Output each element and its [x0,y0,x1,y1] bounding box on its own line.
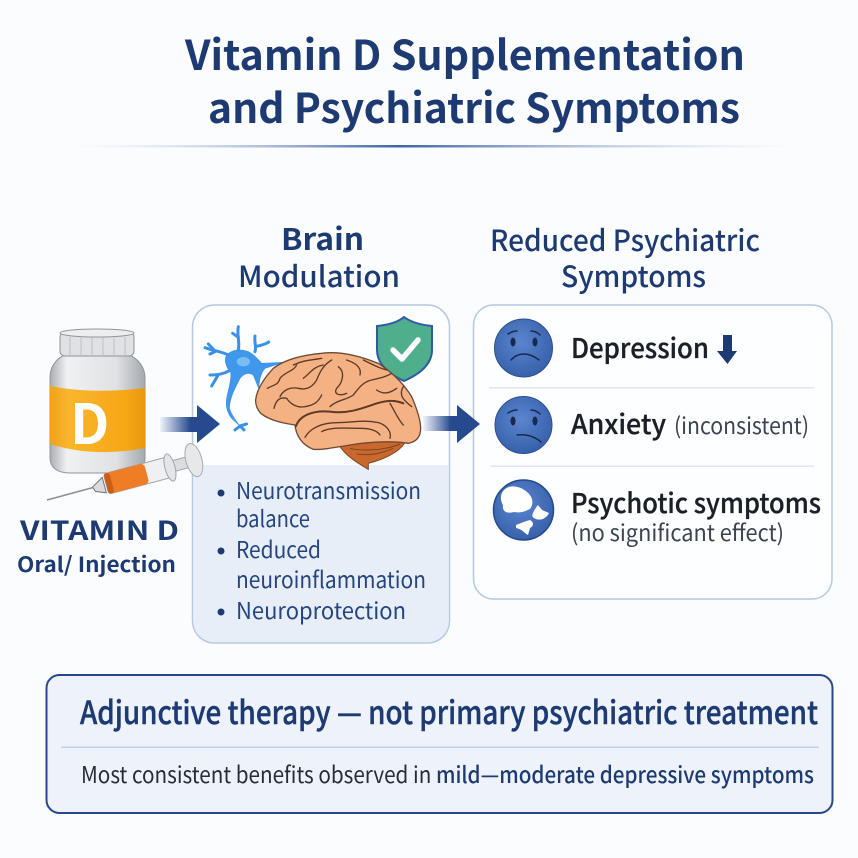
bullet list: Neurotransmission [236,472,421,506]
label: anxiety: (inconsistent) [674,407,809,441]
arrow: brain to symptoms [423,405,480,443]
icon: shield [377,317,432,381]
heading: reduced psychiatric symptoms: Symptoms [561,254,706,296]
icon: vitamin D bottle: D [70,380,109,460]
icon: down arrow [717,335,737,364]
bullet list: balance [236,500,310,534]
icon: neuron [205,327,283,430]
icon: vitamin D bottle [50,329,145,473]
heading: reduced psychiatric symptoms: Reduced Psychiatric [490,218,760,260]
label: psychotic symptoms: Psychotic symptoms [571,482,821,521]
bullet list [218,472,426,626]
heading: reduced psychiatric symptoms [490,218,760,296]
arrow: vitamin to brain [160,405,220,443]
label: psychotic symptoms [571,482,821,548]
bullet list: neuroinflammation [236,561,426,595]
panel: adjunctive therapy callout [46,675,832,813]
title [184,22,745,135]
heading: brain modulation: Modulation [238,254,400,296]
label: vitamin D oral/injection: Oral/ Injection [17,549,176,579]
title: and Psychiatric Symptoms [208,75,740,135]
label: psychotic symptoms: (no significant effect) [571,514,784,548]
label: vitamin D oral/injection: VITAMIN D [19,511,179,548]
title: Vitamin D Supplementation [184,22,745,82]
label: vitamin D oral/injection [17,511,179,579]
panel: brain modulation [192,305,450,643]
bullet list: Neuroprotection [236,592,406,626]
icon: brain [256,353,421,469]
callout detail: Most consistent benefits observed in mild—moderate depressive symptoms [81,756,814,790]
heading: brain modulation [238,215,400,296]
icon: worried face [495,396,552,454]
label: anxiety: Anxiety [571,403,666,442]
heading: brain modulation: Brain [281,215,364,259]
label: depression: Depression [571,327,709,366]
bullet list: Reduced [236,531,321,565]
icon: fragmented head [494,480,554,540]
label: anxiety [571,403,809,442]
icon: syringe [47,442,206,504]
panel: reduced symptoms [474,305,832,599]
icon: sad face [494,319,552,377]
